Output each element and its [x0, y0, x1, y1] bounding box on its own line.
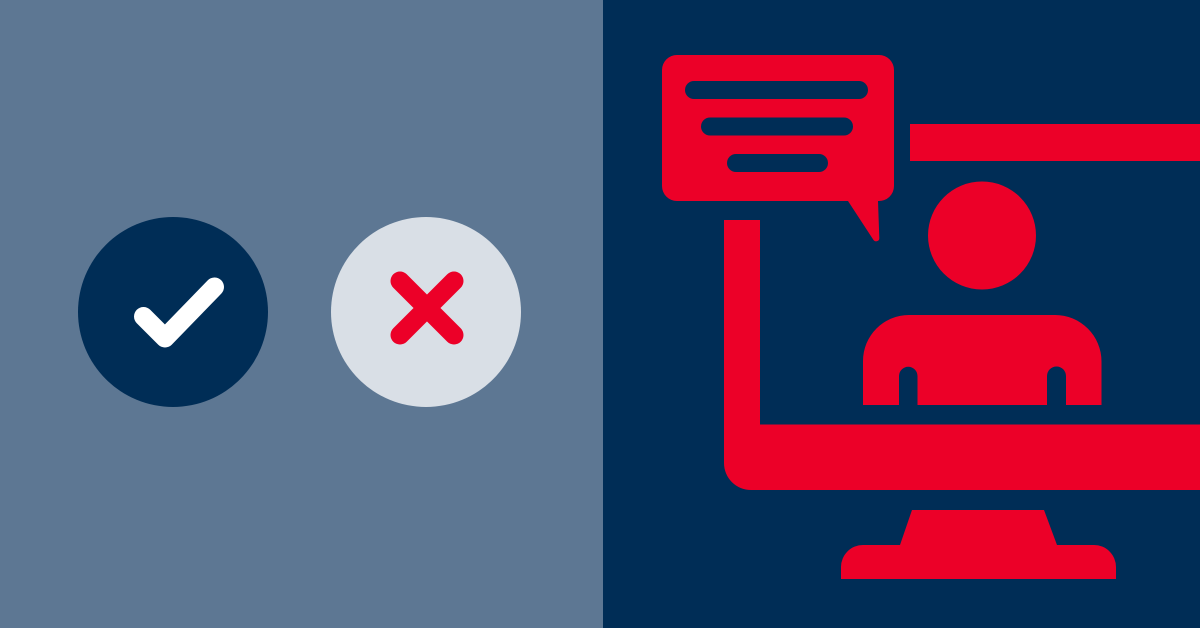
panel: left slate background — [0, 0, 603, 628]
icon: red cross in light circle — [331, 217, 521, 407]
monitor stand — [841, 510, 1116, 579]
icon: speech bubble with text lines — [662, 55, 894, 241]
icon: computer monitor with person — [724, 124, 1200, 579]
monitor top edge — [910, 124, 1200, 161]
person head — [928, 182, 1036, 290]
person shoulders — [863, 315, 1102, 405]
monitor left edge and bottom bezel — [724, 220, 1200, 490]
icon: check mark in navy circle — [78, 217, 268, 407]
panel: right navy background — [603, 0, 1200, 628]
